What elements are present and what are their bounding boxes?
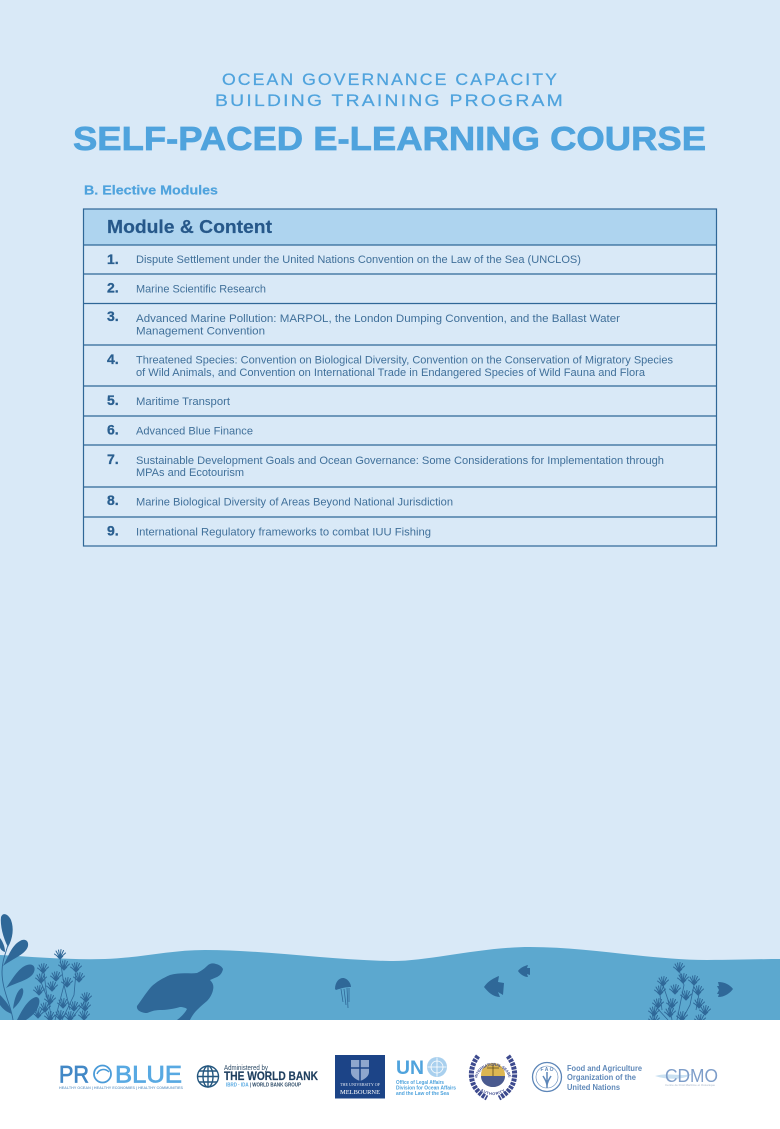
kelp [0,914,39,1020]
logo: World Bank: THE WORLD BANK [224,1071,319,1083]
row 8: 8. [107,492,119,508]
logo: CDMO: Centre de Droit Maritime et Océanique [665,1083,715,1087]
row 7 [107,451,664,479]
right coral [648,962,710,1024]
white footer base [0,1020,780,1129]
logo: PROBLUE: HEALTHY OCEAN | HEALTHY ECONOMIES | HEALTHY COMMUNITIES [59,1086,184,1090]
logo: CDMO: CDMO [665,1066,718,1086]
row 6: Advanced Blue Finance [136,426,253,438]
ocean scene [0,914,780,1024]
fish 3 [717,982,733,997]
logo: World Bank: IBRD · IDA | WORLD BANK GROUP [226,1082,302,1088]
jellyfish [335,978,351,1008]
fish 1 [484,976,504,997]
row 7: Sustainable Development Goals and Ocean Governance: Some Considerations for Implementation through [136,455,664,467]
row 4 [107,351,673,379]
row 3 [107,308,620,338]
logo: PROBLUE [59,1062,184,1090]
row 4: 4. [107,351,119,367]
main title: SELF-PACED E-LEARNING COURSE [73,121,706,158]
logo: World Bank: Administered by [224,1065,268,1072]
row 1: Dispute Settlement under the United Nations Convention on the Law of the Sea (UNCLOS) [136,254,581,266]
table header: Module & Content [107,217,272,237]
row 2 [107,280,266,296]
logo: University of Melbourne: MELBOURNE [340,1089,380,1096]
logo: UN DOALOS: UN [396,1058,424,1079]
header titles [73,70,706,158]
module table [84,209,716,546]
row 8 [107,492,453,508]
row 7: MPAs and Ecotourism [136,467,244,479]
row 5: Maritime Transport [136,396,230,408]
row 1: 1. [107,251,119,267]
section heading: B. Elective Modules [84,182,218,198]
logo: UN DOALOS: Office of Legal Affairs [396,1080,444,1086]
row 3: Advanced Marine Pollution: MARPOL, the London Dumping Convention, and the Ballast Water [136,313,620,325]
row 5 [107,392,230,408]
sea wave [0,947,780,1020]
logo: International Seabed Authority: AUTHORITY [480,1089,504,1096]
row 3: Management Convention [136,326,265,338]
logo: PROBLUE: BLUE [115,1062,182,1088]
row 5: 5. [107,392,119,408]
row 6 [107,422,253,438]
row 4: of Wild Animals, and Convention on International Trade in Endangered Species of Wild Fauna and Flora [136,367,646,379]
logo: UN DOALOS: and the Law of the Sea [396,1091,450,1097]
table header [84,209,716,245]
table frame and row lines [84,209,716,546]
logo: PROBLUE: PR [59,1062,89,1088]
logo: FAO [532,1062,643,1092]
row 9 [107,522,431,538]
fish 2 [518,965,530,977]
logo: FAO: Organization of the [567,1073,637,1082]
row 2: Marine Scientific Research [136,284,266,296]
logo: International Seabed Authority: INTERNATIONAL SEABED [474,1062,512,1078]
subtitle line 2: BUILDING TRAINING PROGRAM [215,91,565,110]
turtle [137,963,223,1020]
row 6: 6. [107,422,119,438]
logo: FAO: United Nations [567,1083,621,1092]
row 2: 2. [107,280,119,296]
logo: FAO: F A O [541,1067,554,1073]
logo: World Bank [198,1065,319,1088]
row 3: 3. [107,308,119,324]
row 4: Threatened Species: Convention on Biological Diversity, Convention on the Conservation of Migratory Species [136,354,673,366]
logo: UN DOALOS: Division for Ocean Affairs [396,1086,456,1092]
logo: University of Melbourne [335,1055,385,1098]
logo: University of Melbourne: THE UNIVERSITY OF [340,1082,381,1087]
subtitle line 1: OCEAN GOVERNANCE CAPACITY [222,70,559,89]
row 9: 9. [107,522,119,538]
row 8: Marine Biological Diversity of Areas Beyond National Jurisdiction [136,496,453,508]
row 9: International Regulatory frameworks to combat IUU Fishing [136,526,431,538]
logo: FAO: Food and Agriculture [567,1064,643,1073]
logo: International Seabed Authority [468,1054,518,1100]
logo: UN DOALOS [396,1057,456,1097]
row 7: 7. [107,451,119,467]
left coral [32,950,92,1021]
